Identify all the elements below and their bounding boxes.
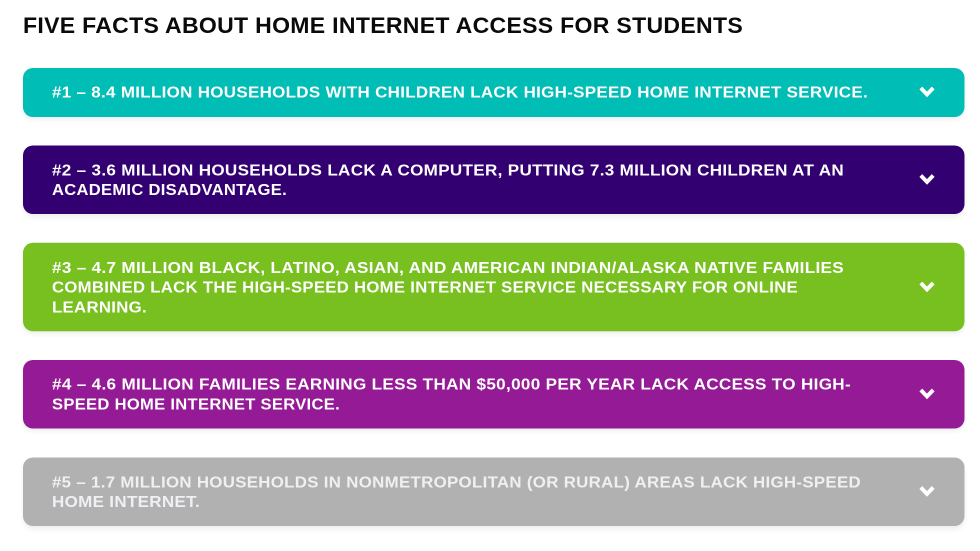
fact 4 text bbox=[52, 377, 851, 414]
panel: fact 5 bbox=[23, 458, 964, 530]
icon: chevron 2 bbox=[921, 176, 933, 182]
fact 3 text bbox=[52, 260, 844, 316]
icon: chevron 1 bbox=[921, 88, 933, 94]
fact 5 text bbox=[52, 474, 861, 511]
fact 3 text: #3 – 4.7 MILLION BLACK, LATINO, ASIAN, AND AMERICAN INDIAN/ALASKA NATIVE FAMILIES bbox=[52, 260, 844, 277]
fact 2 text: ACADEMIC DISADVANTAGE. bbox=[52, 182, 287, 199]
fact 3 text: COMBINED LACK THE HIGH-SPEED HOME INTERNET SERVICE NECESSARY FOR ONLINE bbox=[52, 280, 798, 297]
icon: chevron 3 bbox=[921, 283, 933, 289]
fact 2 text: #2 – 3.6 MILLION HOUSEHOLDS LACK A COMPUTER, PUTTING 7.3 MILLION CHILDREN AT AN bbox=[52, 162, 844, 180]
fact 4 text: #4 – 4.6 MILLION FAMILIES EARNING LESS THAN $50,000 PER YEAR LACK ACCESS TO HIGH- bbox=[52, 377, 851, 394]
panel: fact 1 bbox=[23, 68, 964, 120]
panel: fact 3 bbox=[23, 243, 964, 334]
fact 5 text: #5 – 1.7 MILLION HOUSEHOLDS IN NONMETROPOLITAN (OR RURAL) AREAS LACK HIGH-SPEED bbox=[52, 474, 861, 491]
fact 4 text: SPEED HOME INTERNET SERVICE. bbox=[52, 396, 340, 414]
fact 1 text: #1 – 8.4 MILLION HOUSEHOLDS WITH CHILDREN LACK HIGH-SPEED HOME INTERNET SERVICE. bbox=[52, 85, 868, 102]
title: FIVE FACTS ABOUT HOME INTERNET ACCESS FOR STUDENTS bbox=[23, 13, 743, 38]
panel: fact 2 bbox=[23, 146, 964, 218]
fact 2 text bbox=[52, 162, 844, 199]
icon: chevron 5 bbox=[921, 488, 933, 494]
panel: fact 4 bbox=[23, 360, 964, 432]
fact 3 text: LEARNING. bbox=[52, 300, 147, 316]
fact 5 text: HOME INTERNET. bbox=[52, 494, 200, 511]
icon: chevron 4 bbox=[921, 390, 933, 396]
